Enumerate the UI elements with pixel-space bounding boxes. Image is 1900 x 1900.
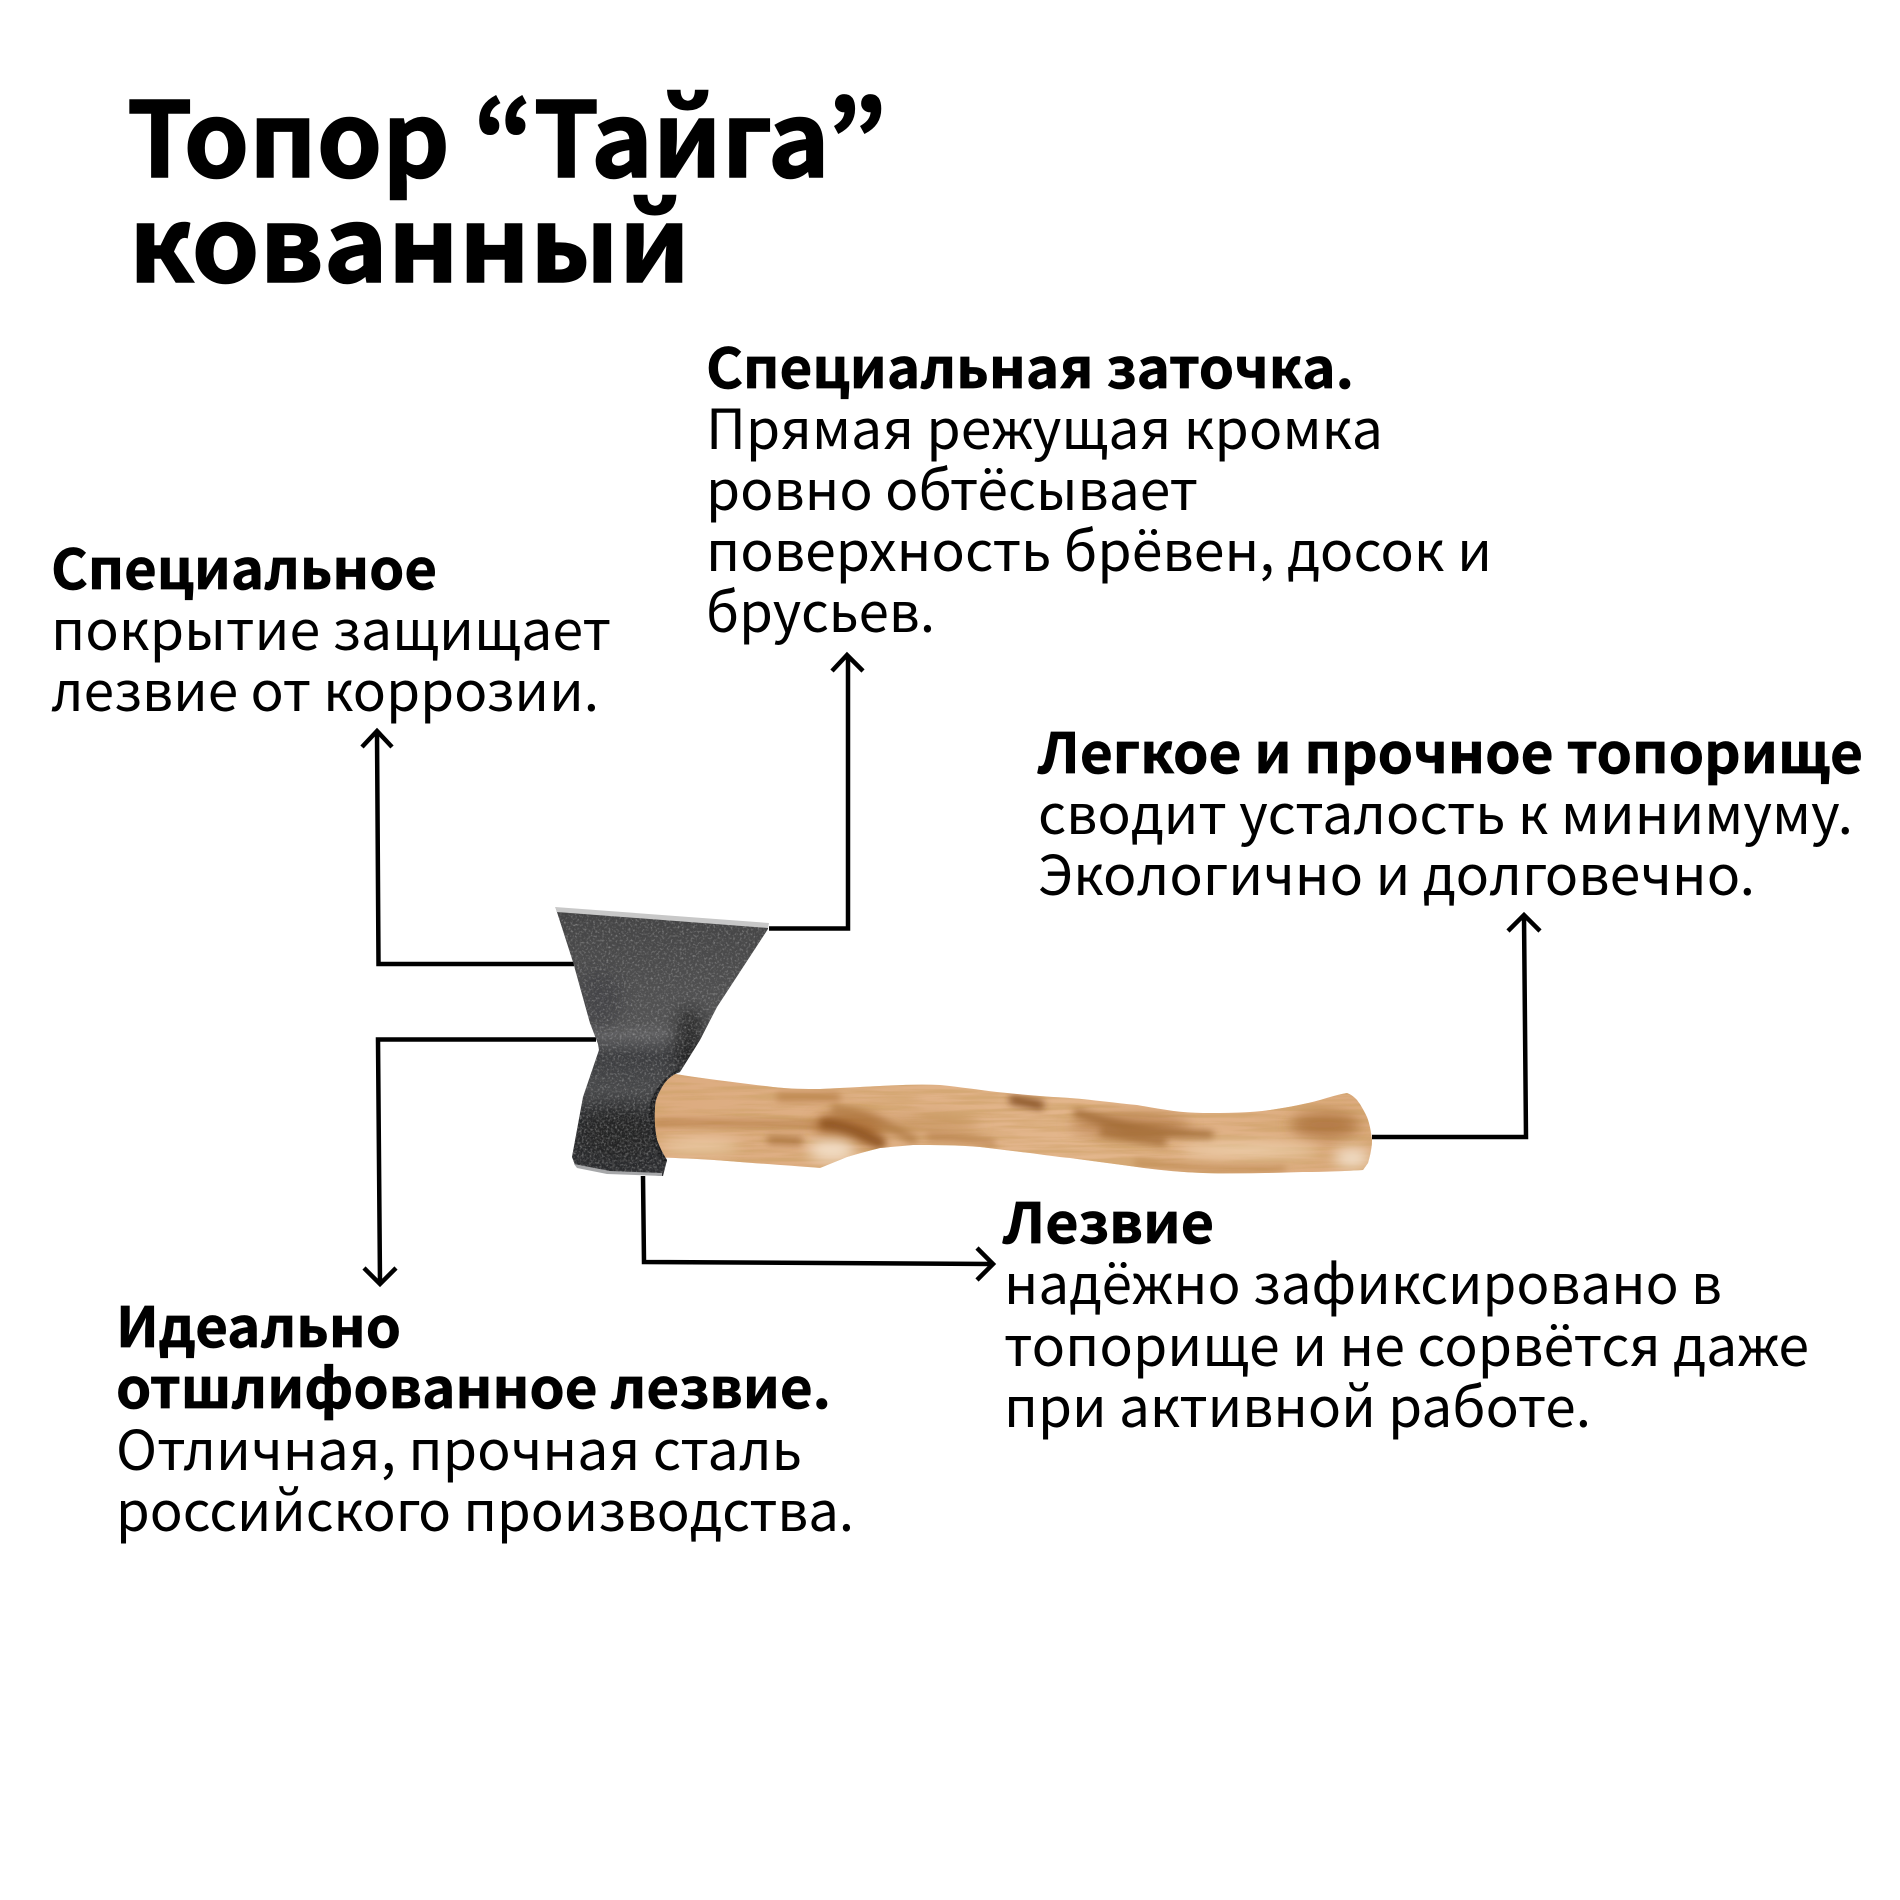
text block: blade fixing: топорище и не сорвётся даже xyxy=(1004,1302,1809,1382)
axe handle xyxy=(654,1074,1372,1174)
text block: handle xyxy=(1037,709,1863,911)
sharpened top edge xyxy=(555,907,769,928)
text block: coating: Специальное xyxy=(51,525,437,605)
text block: polished blade: российского производства. xyxy=(116,1467,854,1547)
arrow: sharpening xyxy=(769,655,863,928)
arrow: blade fixing xyxy=(643,1176,993,1280)
text block: blade fixing: Лезвие xyxy=(1002,1179,1214,1259)
text block: sharpening: брусьев. xyxy=(706,568,935,648)
text block: sharpening: Специальная заточка. xyxy=(706,324,1354,404)
text block: sharpening: поверхность брёвен, досок и xyxy=(706,507,1492,587)
title xyxy=(127,56,887,312)
text block: blade fixing: надёжно зафиксировано в xyxy=(1004,1240,1722,1320)
text block: sharpening: Прямая режущая кромка xyxy=(706,385,1383,465)
arrow: polished blade xyxy=(364,1040,596,1284)
text block: handle: сводит усталость к минимуму. xyxy=(1038,770,1853,850)
text block: sharpening xyxy=(706,324,1492,648)
arrow: coating xyxy=(362,731,574,964)
text block: sharpening: ровно обтёсывает xyxy=(706,446,1198,526)
title: Топор “Тайга” xyxy=(127,56,887,207)
bottom polished edge xyxy=(574,1164,662,1176)
text block: handle: Легкое и прочное топорище xyxy=(1037,709,1863,789)
text block: blade fixing xyxy=(1002,1179,1809,1443)
text block: polished blade xyxy=(116,1283,854,1547)
arrow: handle xyxy=(1372,915,1540,1137)
axe head xyxy=(555,907,769,1176)
text block: coating: лезвие от коррозии. xyxy=(51,647,599,727)
text block: blade fixing: при активной работе. xyxy=(1004,1363,1591,1443)
text block: polished blade: Идеально xyxy=(116,1283,401,1363)
title: кованный xyxy=(129,161,690,312)
text block: coating xyxy=(51,525,611,727)
text block: polished blade: отшлифованное лезвие. xyxy=(116,1344,831,1424)
axe illustration xyxy=(555,907,1380,1180)
text block: coating: покрытие защищает xyxy=(51,586,611,666)
text block: handle: Экологично и долговечно. xyxy=(1038,831,1755,911)
text block: polished blade: Отличная, прочная сталь xyxy=(116,1406,802,1486)
